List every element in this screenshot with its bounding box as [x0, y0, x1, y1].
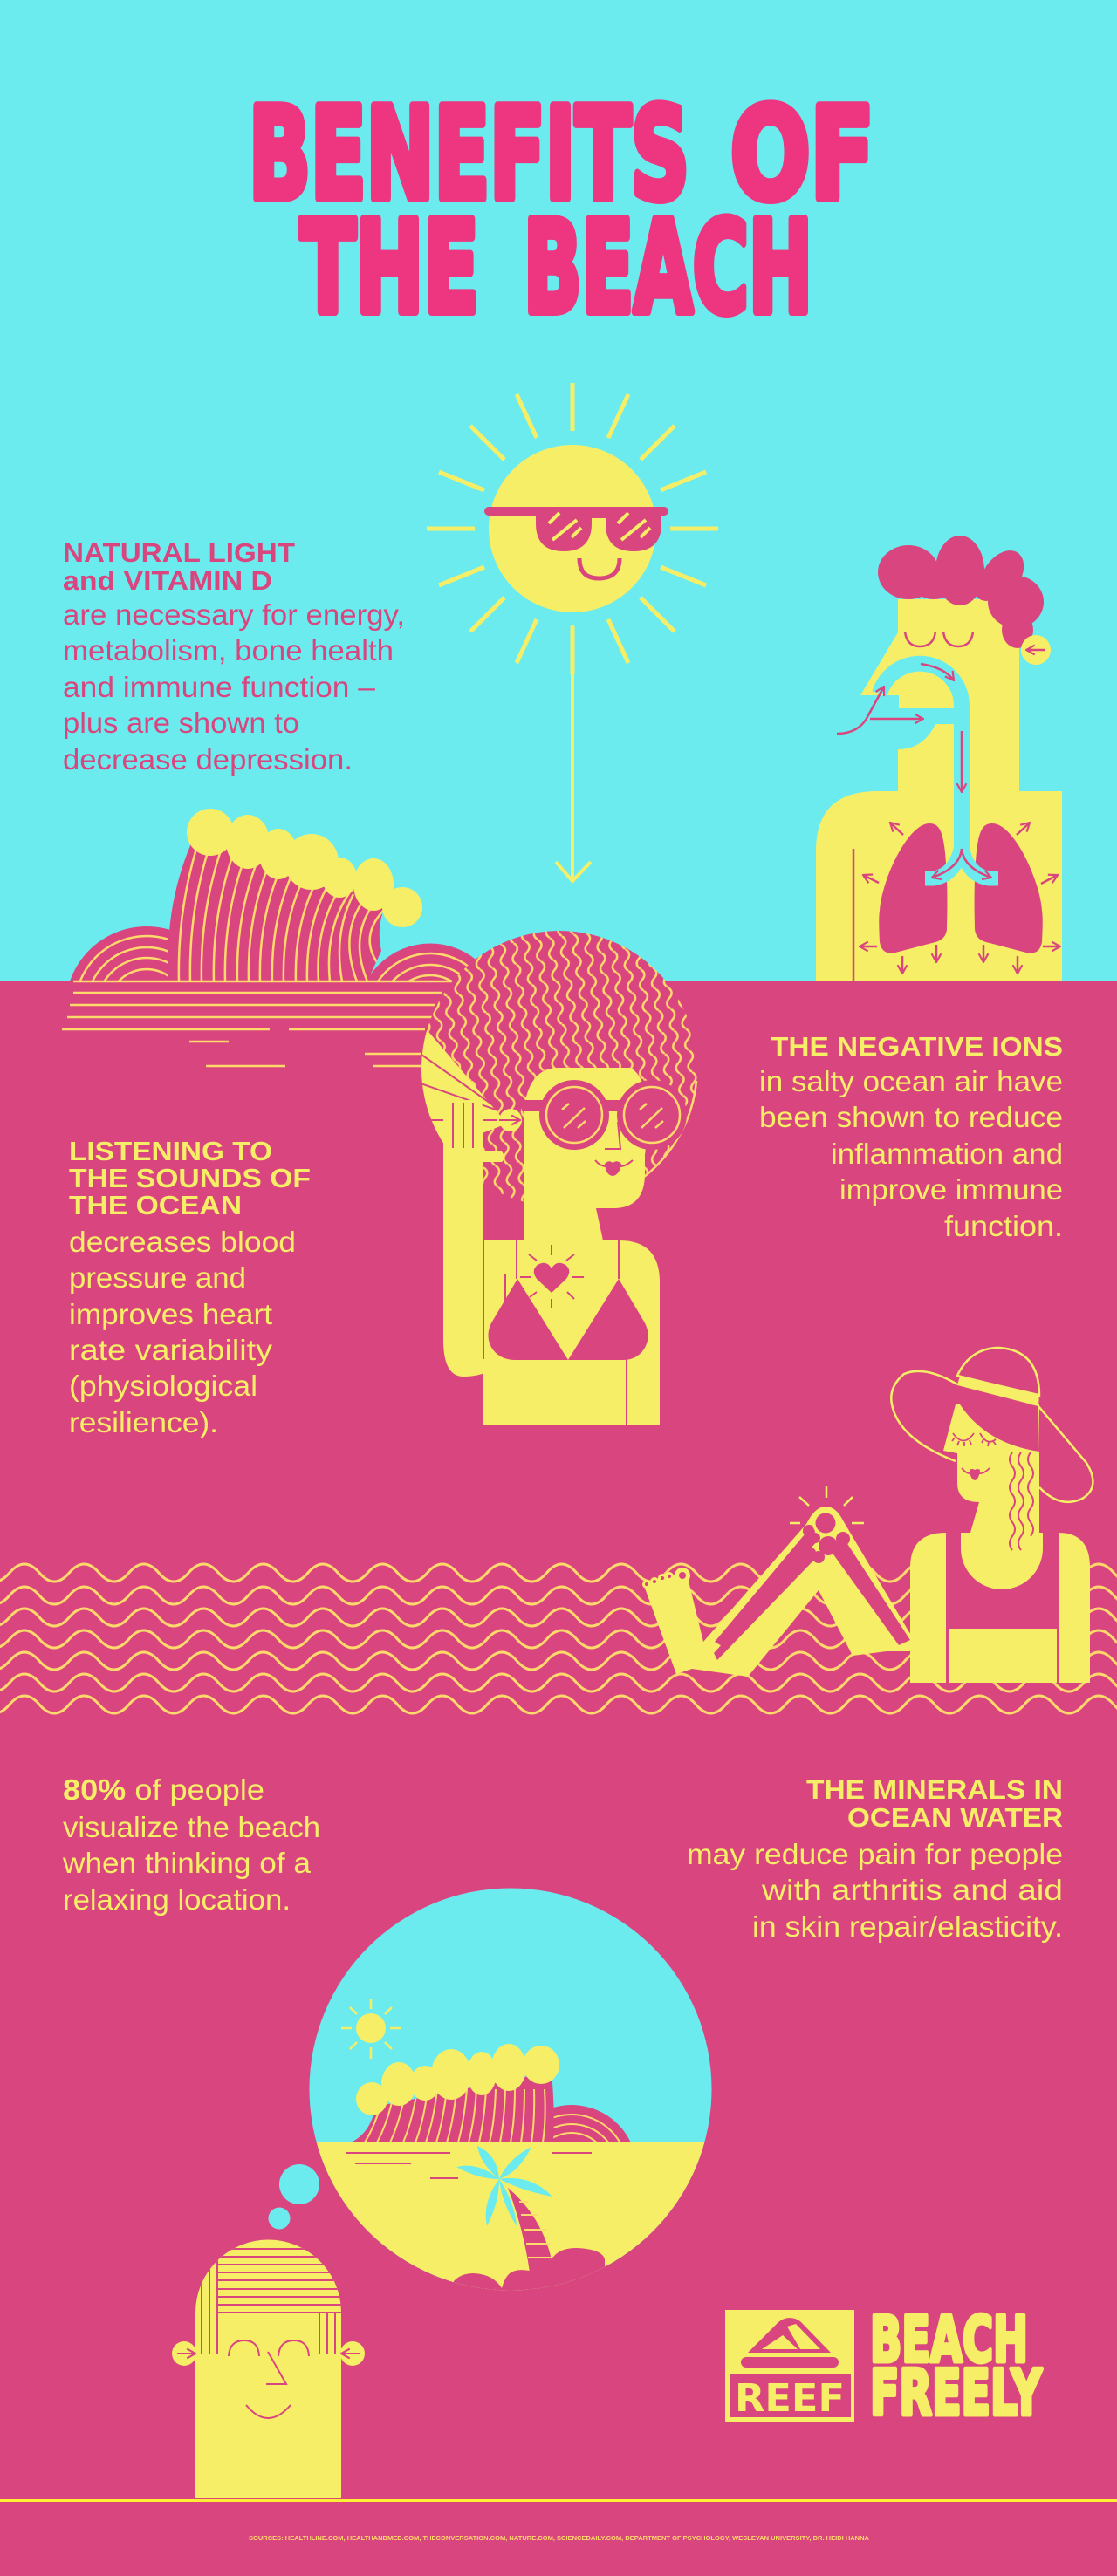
text: negative ions: been shown to reduce — [759, 1101, 1063, 1133]
knee bones — [803, 1525, 850, 1563]
wavy ocean lines — [0, 1564, 1117, 1713]
text: listening to the sounds of the ocean: pressure and — [69, 1261, 246, 1294]
text: natural light and vitamin D: metabolism, bone health — [63, 634, 394, 666]
title — [249, 81, 874, 342]
illustration: woman with afro listening to the ocean — [410, 931, 697, 1425]
text: natural light and vitamin D: NATURAL LIGHT — [63, 537, 295, 568]
text: negative ions: function. — [944, 1210, 1063, 1242]
palm tree — [456, 2146, 553, 2272]
torso — [483, 1240, 660, 1425]
text: minerals in ocean water — [687, 1774, 1063, 1943]
airway — [897, 695, 956, 749]
nose and lips — [605, 1122, 620, 1149]
water lines on horizon — [62, 981, 452, 1066]
text: listening to the sounds of the ocean: LISTENING TO — [69, 1136, 272, 1166]
sound fan — [421, 1029, 501, 1143]
text: natural light and vitamin D: are necessary for energy, — [63, 598, 405, 631]
background: sky — [0, 0, 1117, 981]
ear — [499, 1109, 522, 1131]
torso with tank top — [946, 1533, 1059, 1683]
lungs — [879, 823, 947, 953]
title: BEACH — [524, 195, 812, 342]
illustration: thought bubble with beach scene — [297, 1888, 724, 2303]
text: listening to the sounds of the ocean — [69, 1136, 311, 1438]
text: minerals in ocean water: may reduce pain for people — [687, 1838, 1063, 1870]
round glasses — [522, 1100, 661, 1111]
background: pink sea — [0, 981, 1117, 2576]
logo: Reef Beach Freely: FREELY — [870, 2356, 1043, 2429]
logo: Reef Beach Freely: REEF — [735, 2376, 845, 2421]
text: minerals in ocean water: with arthritis and aid — [761, 1874, 1063, 1906]
thought bubbles — [269, 2164, 319, 2230]
text: negative ions: THE NEGATIVE IONS — [771, 1031, 1063, 1062]
ears — [172, 2341, 196, 2366]
lashes and lips — [952, 1433, 996, 1446]
illustration: smiling sun with sunglasses — [427, 383, 718, 674]
text: listening to the sounds of the ocean: THE SOUNDS OF — [69, 1163, 311, 1193]
title: OF — [730, 81, 874, 229]
water marks — [346, 2153, 592, 2178]
text: listening to the sounds of the ocean: decreases blood — [69, 1226, 296, 1258]
text: negative ions: improve immune — [839, 1173, 1063, 1206]
text: 80% of people: 80% of people — [63, 1773, 264, 1806]
arrow: sunlight down to the woman — [556, 625, 591, 881]
text: negative ions — [759, 1031, 1063, 1242]
logo: Reef Beach Freely — [725, 2303, 1043, 2429]
face and neck — [524, 1068, 645, 1240]
title: BENEFITS — [249, 81, 689, 229]
text: 80% of people: relaxing location. — [63, 1883, 291, 1916]
text: natural light and vitamin D — [63, 537, 405, 776]
text: minerals in ocean water: OCEAN WATER — [847, 1802, 1063, 1833]
text: natural light and vitamin D: decrease depression. — [63, 743, 353, 776]
heart — [534, 1263, 569, 1293]
text: negative ions: in salty ocean air have — [759, 1065, 1063, 1097]
nose and smile — [266, 2352, 286, 2384]
breath arrows — [837, 632, 1060, 981]
title: THE — [300, 195, 479, 342]
text: listening to the sounds of the ocean: THE OCEAN — [69, 1190, 242, 1220]
small sun — [341, 1999, 401, 2059]
text: 80% of people: visualize the beach — [63, 1811, 320, 1843]
footer rule — [0, 2499, 1117, 2502]
text: listening to the sounds of the ocean: rate variability — [69, 1334, 273, 1366]
hair — [878, 536, 1044, 648]
illustration: striped wave and hills on horizon — [70, 809, 476, 981]
face, neck and hair — [943, 1404, 1043, 1589]
text: natural light and vitamin D: and immune function – — [63, 671, 376, 703]
hill and wave — [553, 2105, 631, 2142]
logo: Reef Beach Freely: BEACH — [870, 2303, 1028, 2376]
foreground mounds — [454, 2248, 606, 2291]
illustration: breathing man with lungs — [816, 536, 1062, 981]
text: minerals in ocean water: in skin repair/elasticity. — [752, 1910, 1063, 1943]
illustration: woman in sun hat relaxing in the water — [642, 1348, 1093, 1683]
arm and hand — [443, 1100, 504, 1377]
text: listening to the sounds of the ocean: (physiological — [69, 1370, 257, 1402]
text: 80% of people: when thinking of a — [62, 1847, 312, 1879]
text: negative ions: inflammation and — [831, 1138, 1063, 1170]
text: minerals in ocean water: THE MINERALS IN — [806, 1774, 1063, 1805]
text: natural light and vitamin D: and VITAMIN D — [63, 565, 272, 596]
sun hat — [955, 1387, 1039, 1452]
closed eyes — [229, 2340, 309, 2356]
bikini — [488, 1279, 568, 1360]
toes — [642, 1568, 690, 1589]
text: listening to the sounds of the ocean: resilience). — [69, 1406, 218, 1438]
bent leg — [644, 1507, 910, 1677]
sources: SOURCES: HEALTHLINE.COM, HEALTHANDMED.COM, THECONVERSATION.COM, NATURE.COM, SCIENCEDAILY.COM, DEPARTMENT OF PSYCHOLOGY, WESLEYAN UNIVERSITY, DR. HEIDI HANNA — [249, 2534, 870, 2542]
text: natural light and vitamin D: plus are shown to — [63, 707, 299, 739]
text: listening to the sounds of the ocean: improves heart — [69, 1298, 272, 1330]
afro hair — [421, 931, 697, 1206]
illustration: smiling man imagining the beach — [172, 2233, 365, 2498]
text: 80% of people — [62, 1773, 320, 1916]
